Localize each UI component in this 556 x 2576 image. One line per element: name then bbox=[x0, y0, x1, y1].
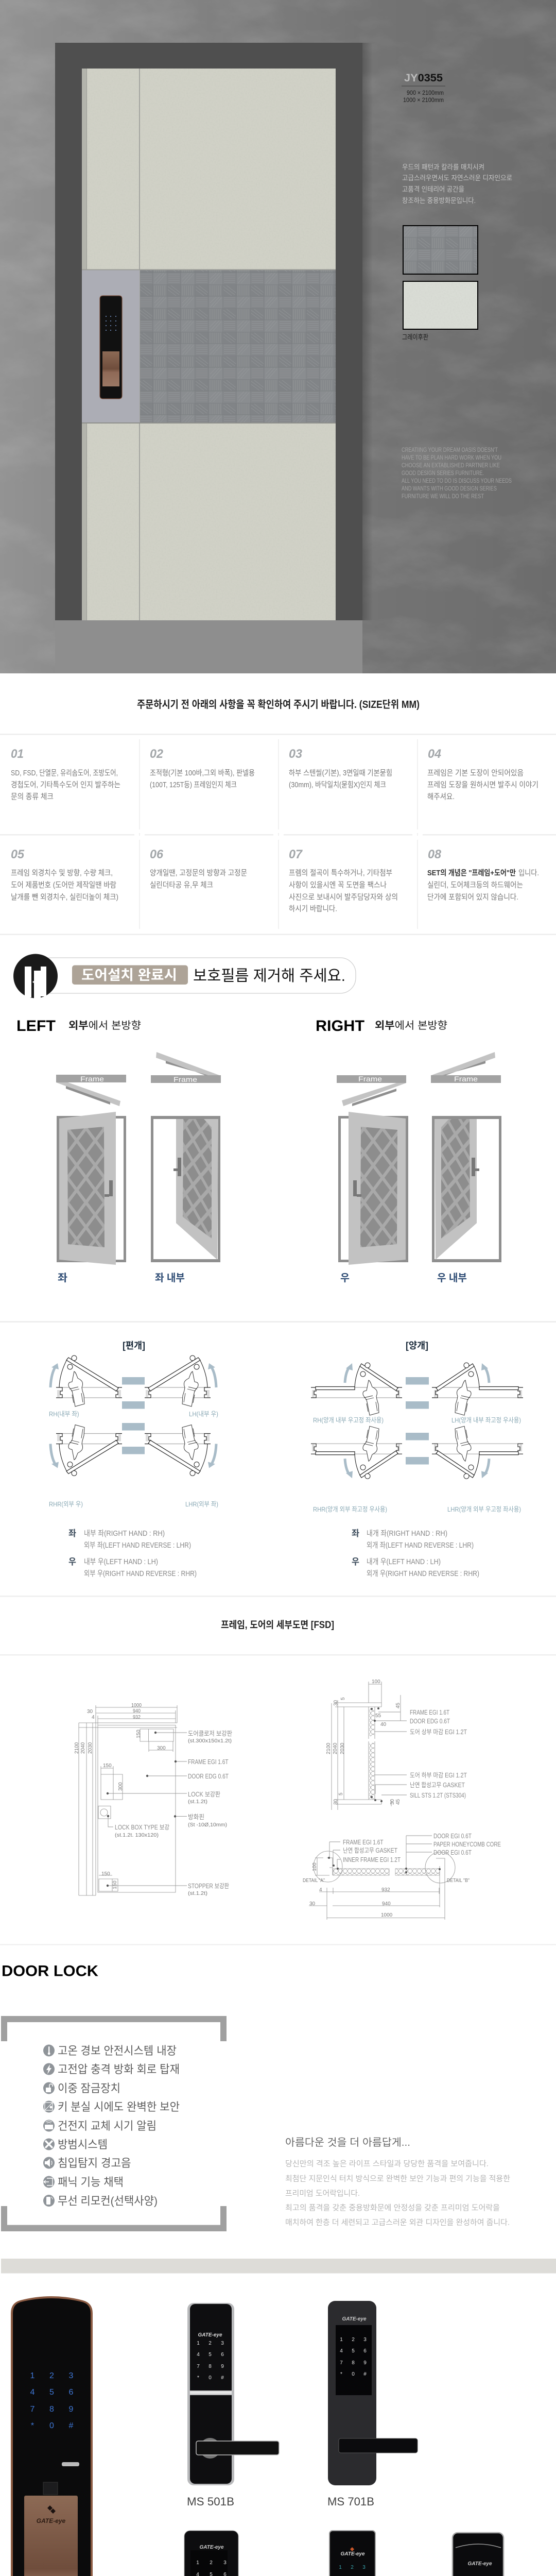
product: MS 701B lock: 1 bbox=[340, 2337, 343, 2343]
label: door right: 우 bbox=[340, 1273, 350, 1284]
door leaf bbox=[82, 69, 336, 620]
notice 08: 실린더, 도어체크등의 하드웨어는 bbox=[427, 881, 523, 889]
chart: horizontal section drawing: FRAME EGI 1.6T bbox=[343, 1839, 384, 1846]
chart: door elevation drawing: 2030 bbox=[88, 1742, 93, 1754]
product: MS 501B lock: 1 bbox=[197, 2341, 200, 2346]
notice 08: 단가에 포함되어 있지 않습니다. bbox=[427, 893, 518, 902]
heading: LEFT: 외부에서 본방향 bbox=[68, 1020, 141, 1031]
heading: single door: [편개] bbox=[123, 1341, 145, 1351]
floor band bbox=[55, 620, 362, 673]
chart: door elevation drawing: LOCK 보강판 bbox=[188, 1791, 220, 1798]
product: MS 501B lock: 0 bbox=[208, 2375, 212, 2381]
product: MS 501B lock: 3 bbox=[221, 2341, 224, 2346]
chart: door elevation drawing: 150 bbox=[101, 1871, 110, 1877]
product: MS 501B lock: 2 bbox=[208, 2341, 212, 2346]
text block: door lock description: 프리미엄 도어락입니다. bbox=[285, 2189, 360, 2198]
notice 03: 03 bbox=[289, 747, 303, 761]
panel: double door swing types bbox=[311, 1341, 523, 1578]
chart: vertical section drawing: 2100 bbox=[326, 1742, 332, 1754]
diagram: frame open outward bbox=[56, 1075, 126, 1106]
chart: door elevation drawing: (st.1.2t) bbox=[188, 1891, 207, 1896]
chart: vertical section drawing: 55 bbox=[375, 1713, 381, 1719]
product: MS 830B lock bbox=[184, 2531, 284, 2576]
product: MS 701B lock: GATE-eye bbox=[342, 2316, 367, 2322]
chart: vertical section drawing: 2030 bbox=[340, 1742, 345, 1754]
text block: door lock description: 최첨단 지문인식 터치 방식으로 완벽한 보안 기능과 편의 기능을 적용한 bbox=[285, 2174, 510, 2183]
notice 02: (100T, 125T등) 프레임인지 체크 bbox=[150, 781, 237, 789]
product: MSP 300 lock: 1 bbox=[30, 2371, 35, 2380]
banner: remove protective film bbox=[13, 954, 356, 998]
notice 07: 사진으로 보내시어 발주담당자와 상의 bbox=[289, 893, 398, 902]
chart: door elevation drawing: 2040 bbox=[80, 1742, 86, 1754]
heading: RIGHT: 외부에서 본방향 bbox=[375, 1020, 447, 1031]
notice 06 bbox=[150, 848, 247, 889]
pill label bbox=[72, 965, 188, 985]
chart: vertical section drawing: 100 bbox=[372, 1679, 380, 1685]
heading: order notice: 주문하시기 전 아래의 사항을 꼭 확인하여 주시기 바랍니다. (SIZE단위 MM) bbox=[137, 699, 420, 710]
chart: vertical section drawing: FRAME EGI 1.6T bbox=[410, 1709, 449, 1716]
chart: vertical section drawing: 도어 상부 마감 EGI 1.2T bbox=[410, 1728, 467, 1736]
notice 06: 06 bbox=[150, 848, 164, 861]
product: MS 701B lock: 9 bbox=[363, 2360, 367, 2366]
icon: door in circle bbox=[13, 954, 58, 998]
chart: door elevation drawing bbox=[74, 1703, 232, 1896]
heading: LEFT bbox=[16, 1018, 141, 1035]
product: MS 902 lock: GATE-eye bbox=[340, 2551, 365, 2557]
notice 07: 프렘의 절곡이 특수하거나, 기타첨부 bbox=[289, 869, 392, 877]
product: MS 902 lock bbox=[329, 2531, 418, 2576]
chart: horizontal section drawing bbox=[303, 1833, 501, 1920]
product: MS 601B lock bbox=[453, 2533, 553, 2576]
text: door sizes bbox=[403, 90, 444, 104]
chart: door elevation drawing: 150 bbox=[112, 1880, 118, 1889]
label: double LHR: LHR(양개 외부 우고정 좌사용) bbox=[447, 1505, 521, 1513]
notice 01: 01 bbox=[11, 747, 24, 761]
legend: single door: 외부 우(RIGHT HAND REVERSE : RHR) bbox=[84, 1569, 197, 1578]
chart: vertical section drawing: 도어 하부 마감 EGI 1.2T bbox=[410, 1772, 467, 1779]
notice 08: SET의 개념은 "프레임+도어"만 bbox=[427, 869, 516, 877]
product: MSP 300 lock: 0 bbox=[49, 2421, 54, 2430]
feature: panic function: 패닉 기능 채택 bbox=[58, 2176, 124, 2189]
notice 02: 조적형(기본 100바,그외 바폭), 판넬용 bbox=[150, 769, 255, 777]
panel: right swing bbox=[316, 1018, 501, 1284]
product: MS 902 lock: 2 bbox=[351, 2565, 354, 2570]
product: MSP 300 lock: * bbox=[31, 2421, 34, 2430]
notice 01: 경첩도어, 기타특수도어 인지 발주하는 bbox=[11, 781, 120, 789]
product: MS 501B lock: 5 bbox=[208, 2352, 212, 2358]
chart: horizontal section drawing: INNER FRAME EGI 1.2T bbox=[343, 1856, 401, 1863]
product: MS 902 lock: 3 bbox=[362, 2565, 366, 2570]
text: door sizes: 1000 × 2100mm bbox=[403, 97, 444, 104]
diagram: frame open inward bbox=[151, 1052, 221, 1083]
product: MSP 300 lock bbox=[11, 2296, 93, 2576]
text: Korean description: 고급스러우면서도 자연스러운 디자인으로 bbox=[402, 174, 512, 182]
notice 08 bbox=[427, 848, 539, 902]
product: MS 501B lock: * bbox=[197, 2375, 199, 2381]
product: MS 701B lock: 3 bbox=[363, 2337, 367, 2343]
text: English description: FURNITURE WE WILL DO THE REST bbox=[402, 494, 484, 500]
notice 03: 하부 스텐씰(기본), 3면일때 기본묻힘 bbox=[289, 769, 392, 777]
label: RHR: RHR(외부 우) bbox=[49, 1500, 83, 1508]
product: MS 701B lock: 8 bbox=[352, 2360, 355, 2366]
heading: LEFT: LEFT bbox=[16, 1018, 56, 1035]
swatch: weave pattern bbox=[403, 226, 478, 274]
feature: wireless remote: 무선 리모컨(선택사양) bbox=[58, 2195, 158, 2207]
feature: battery alert: 건전지 교체 시기 알림 bbox=[58, 2120, 157, 2132]
diagram: frame open outward: Frame bbox=[80, 1075, 104, 1083]
chart: vertical section drawing: 30 bbox=[390, 1799, 395, 1805]
legend: double door: 내개 우(LEFT HAND : LH) bbox=[367, 1557, 441, 1566]
diagram: right door exterior bbox=[338, 1112, 408, 1265]
heading: frame and door detail drawings: 프레임, 도어의 세부도면 [FSD] bbox=[221, 1619, 334, 1631]
chart: door elevation drawing: 150 bbox=[103, 1763, 112, 1769]
notice 01 bbox=[11, 747, 120, 801]
chart: door elevation drawing: 300 bbox=[118, 1782, 124, 1791]
chart: vertical section drawing: 40 bbox=[380, 1722, 387, 1727]
product: MSP 300 lock: 3 bbox=[69, 2371, 74, 2380]
product: MS 501B lock: 9 bbox=[221, 2364, 224, 2369]
product: MS 701B lock: 2 bbox=[352, 2337, 355, 2343]
chart: door elevation drawing: 932 bbox=[133, 1715, 141, 1720]
notice 05 bbox=[11, 848, 118, 902]
label: double RHR: RHR(양개 외부 좌고정 우사용) bbox=[313, 1505, 387, 1513]
feature: double lock: 이중 잠금장치 bbox=[58, 2082, 120, 2095]
notice 04 bbox=[427, 747, 538, 801]
product: MS 701B lock: 6 bbox=[363, 2348, 367, 2354]
label: RH: RH(내부 좌) bbox=[49, 1410, 79, 1418]
notice 02 bbox=[150, 747, 255, 789]
feature: lost key security: 키 분실 시에도 완벽한 보안 bbox=[58, 2100, 180, 2113]
product: MSP 300 lock: GATE-eye bbox=[37, 2517, 66, 2524]
chart: horizontal section drawing: 940 bbox=[382, 1901, 391, 1907]
notice 07: 사항이 있을시엔 꼭 도면을 팩스나 bbox=[289, 881, 387, 889]
legend: double door: 외개 좌(LEFT HAND REVERSE : LHR) bbox=[367, 1541, 474, 1550]
heading: RIGHT bbox=[316, 1018, 447, 1035]
legend: double door: 내개 좌(RIGHT HAND : RH) bbox=[367, 1529, 447, 1538]
divider band bbox=[1, 2259, 556, 2273]
product: MS 501B lock: # bbox=[221, 2375, 224, 2381]
notice 08: 08 bbox=[428, 848, 442, 861]
panel: hero door on concrete wall bbox=[0, 0, 556, 673]
notice 07: 07 bbox=[289, 848, 303, 861]
chart: vertical section drawing: 45 bbox=[395, 1799, 401, 1805]
legend: double door bbox=[352, 1529, 479, 1578]
notice 02: 02 bbox=[150, 747, 164, 761]
product: MS 830B lock: 1 bbox=[196, 2560, 199, 2566]
product: MSP 300 lock: 7 bbox=[30, 2405, 35, 2414]
chart: door elevation drawing: 30 bbox=[87, 1709, 93, 1715]
product: MS 501B lock: 6 bbox=[221, 2352, 224, 2358]
product: MS 701B lock: 5 bbox=[352, 2348, 355, 2354]
panel: left swing bbox=[16, 1018, 221, 1284]
chart: vertical section drawing: 5 bbox=[340, 1697, 346, 1700]
product: MS 701B lock: 4 bbox=[340, 2348, 343, 2354]
text: Korean description: 우드의 패턴과 칼라를 매치시켜 bbox=[402, 163, 484, 171]
chart: door elevation drawing: 4 bbox=[92, 1715, 95, 1720]
legend: double door: 좌 bbox=[352, 1529, 359, 1538]
notice 04: 04 bbox=[428, 747, 441, 761]
product: MS 701B lock: 0 bbox=[352, 2371, 355, 2377]
notice 06: 양개일땐, 고정문의 방향과 고정문 bbox=[150, 869, 247, 877]
product: MS 701B lock bbox=[327, 2301, 418, 2508]
product: MSP 300 lock: 2 bbox=[49, 2371, 54, 2380]
product: MS 830B lock: 3 bbox=[223, 2560, 227, 2566]
chart: door elevation drawing: DOOR EDG 0.6T bbox=[188, 1773, 229, 1780]
chart: horizontal section drawing: 1000 bbox=[381, 1912, 393, 1918]
text block: door lock description: 당신만의 격조 높은 라이프 스타일과 당당한 품격을 보여줍니다. bbox=[285, 2160, 489, 2168]
product: MS 701B lock: # bbox=[363, 2371, 367, 2377]
product: MS 501B lock: 8 bbox=[208, 2364, 212, 2369]
notice 05: 날개를 뺀 외경치수, 실린더높이 체크) bbox=[11, 893, 118, 902]
product: MSP 300 lock: 5 bbox=[49, 2388, 54, 2397]
product: MS 701B lock: 7 bbox=[340, 2360, 343, 2366]
diagram: single door four swings bbox=[50, 1355, 216, 1476]
label: double RH: RH(양개 내부 우고정 좌사용) bbox=[313, 1416, 384, 1424]
chart: vertical section drawing: 30 bbox=[333, 1700, 339, 1706]
diagram: frame open outward right bbox=[337, 1075, 406, 1106]
chart: vertical section drawing: 5 bbox=[338, 1792, 344, 1795]
chart: door elevation drawing: (st.1.2t. 130x120) bbox=[115, 1833, 159, 1838]
notice 06: 실린더타공 유,무 체크 bbox=[150, 881, 213, 889]
chart: vertical section drawing: 30 bbox=[333, 1799, 339, 1805]
heading: double door: [양개] bbox=[406, 1341, 428, 1351]
icon: door lock on leaf bbox=[100, 296, 122, 399]
legend: single door bbox=[68, 1529, 197, 1578]
chart: horizontal section drawing: DOOR EGI 0.6T bbox=[433, 1833, 472, 1840]
chart: door elevation drawing: 150 bbox=[136, 1730, 142, 1738]
legend: single door: 좌 bbox=[68, 1529, 76, 1538]
product: MSP 300 lock: 4 bbox=[30, 2388, 35, 2397]
text: door sizes: 900 × 2100mm bbox=[407, 90, 444, 96]
product: MS 830B lock: GATE-eye bbox=[199, 2545, 224, 2550]
label: door right interior: 우 내부 bbox=[437, 1272, 467, 1284]
notice 04: 해주셔요. bbox=[427, 792, 455, 801]
text: English description: CREATIING YOUR DREAM OASIS DOESN'T bbox=[402, 447, 498, 453]
panel: door lock features bbox=[1, 2016, 227, 2231]
panel: notice grid bbox=[0, 734, 556, 935]
notice 08: 입니다. bbox=[518, 869, 539, 877]
notice 01: 문의 종류 체크 bbox=[11, 792, 54, 801]
bracket: bottom bbox=[1, 2206, 227, 2231]
text: swatch label: 그레이후판 bbox=[402, 333, 428, 341]
text block: door lock description bbox=[285, 2137, 510, 2227]
legend: double door: 우 bbox=[352, 1557, 359, 1567]
notice 04: 프레임은 기본 도장이 안되어있음 bbox=[427, 769, 524, 777]
product: MS 501B lock bbox=[187, 2303, 279, 2508]
notice 03: (30mm), 바닥일치(묻힘X)인지 체크 bbox=[289, 781, 386, 789]
product: MS 501B lock: GATE-eye bbox=[198, 2332, 222, 2338]
text: English description: AND WANTS WITH GOOD DESIGN SERIES bbox=[402, 486, 497, 492]
diagram: frame open inward right bbox=[431, 1052, 501, 1083]
product: MS 601B lock: GATE-eye bbox=[467, 2561, 492, 2567]
chart: horizontal section drawing: PAPER HONEYCOMB CORE bbox=[433, 1841, 501, 1848]
diagram: frame open inward: Frame bbox=[173, 1075, 197, 1083]
door frame bbox=[55, 43, 362, 620]
chart: door elevation drawing: 940 bbox=[133, 1708, 141, 1714]
diagram: frame open inward right: Frame bbox=[454, 1075, 478, 1083]
banner text: 보호필름 제거해 주세요. bbox=[193, 968, 345, 985]
chart: vertical section drawing: 난연 합성고무 GASKET bbox=[410, 1782, 465, 1789]
chart: door elevation drawing: (st.1.2t) bbox=[188, 1799, 207, 1805]
notice 05: 프레임 외경치수 및 방향, 수량 체크, bbox=[11, 869, 113, 877]
chart: horizontal section drawing: DETAIL "A" bbox=[303, 1878, 325, 1884]
text: English description: CHOOSE AN EXTABLISHED PARTNER LIKE bbox=[402, 463, 500, 469]
chart: horizontal section drawing: 난연 합성고무 GASKET bbox=[343, 1847, 397, 1854]
label: door left: 좌 bbox=[58, 1272, 67, 1284]
text block: door lock description: 아름다운 것을 더 아름답게... bbox=[285, 2137, 410, 2148]
product: MSP 300 lock: # bbox=[69, 2421, 74, 2430]
text: Korean description: 창조하는 중용방화문입니다. bbox=[402, 197, 476, 205]
diagram: right door interior bbox=[432, 1116, 501, 1262]
feature: intrusion alarm: 침입탐지 경고음 bbox=[58, 2157, 131, 2170]
heading: RIGHT: RIGHT bbox=[316, 1018, 364, 1035]
product: MS 501B lock: 7 bbox=[197, 2364, 200, 2369]
legend: double door: 외개 우(RIGHT HAND REVERSE : RHR) bbox=[367, 1569, 479, 1578]
product: MSP 300 lock: 9 bbox=[69, 2405, 74, 2414]
label: LH: LH(내부 우) bbox=[189, 1410, 218, 1418]
text: English description: ALL YOU NEED TO DO IS DISCUSS YOUR NEEDS bbox=[402, 478, 512, 484]
feature: high voltage protection: 고전압 충격 방화 회로 탑재 bbox=[58, 2063, 180, 2076]
feature: crime prevention: 방범시스템 bbox=[58, 2138, 108, 2151]
chart: door elevation drawing: LOCK BOX TYPE 보강 bbox=[115, 1824, 169, 1831]
product: MSP 300 lock: 8 bbox=[49, 2405, 54, 2414]
product: MS 902 lock: 1 bbox=[339, 2565, 342, 2570]
chart: horizontal section drawing: 100 bbox=[312, 1862, 318, 1871]
diagram: frame open outward right: Frame bbox=[358, 1075, 382, 1083]
diagram: double door four swings bbox=[311, 1363, 523, 1479]
product: MS 501B lock: 4 bbox=[197, 2352, 200, 2358]
notice 04: 프레임 도장을 원하시면 발주시 이야기 bbox=[427, 781, 538, 789]
text: Korean description: 고품격 인테리어 공간을 bbox=[402, 185, 464, 193]
chart: door elevation drawing: 2100 bbox=[74, 1742, 80, 1754]
legend: single door: 내부 좌(RIGHT HAND : RH) bbox=[84, 1529, 165, 1538]
feature: high temperature alarm: 고온 경보 안전시스템 내장 bbox=[58, 2044, 177, 2057]
legend: single door: 내부 우(LEFT HAND : LH) bbox=[84, 1557, 158, 1566]
text: Korean description bbox=[402, 163, 512, 205]
chart: horizontal section drawing: 4 bbox=[319, 1887, 322, 1893]
notice 05: 05 bbox=[11, 848, 25, 861]
label: door left interior: 좌 내부 bbox=[155, 1272, 185, 1284]
title: model number: JY0355 bbox=[404, 72, 443, 84]
notice 07: 하시기 바랍니다. bbox=[289, 905, 337, 913]
chart: horizontal section drawing: DETAIL "B" bbox=[447, 1878, 470, 1884]
label: LHR: LHR(외부 좌) bbox=[185, 1500, 218, 1508]
chart: door elevation drawing: 300 bbox=[157, 1745, 166, 1751]
chart: door elevation drawing: (st.300x150x1.2t) bbox=[188, 1738, 232, 1744]
text block: door lock description: 매치하여 한층 더 세련되고 고급스러운 외관 디자인을 완성하여 줍니다. bbox=[285, 2218, 510, 2227]
chart: door elevation drawing: 1000 bbox=[131, 1703, 142, 1708]
label: MS 501B: MS 501B bbox=[187, 2495, 234, 2508]
chart: door elevation drawing: STOPPER 보강판 bbox=[188, 1883, 229, 1890]
chart: horizontal section drawing: DOOR EGI 0.6T bbox=[433, 1849, 472, 1856]
product: MS 701B lock: * bbox=[340, 2371, 342, 2377]
chart: vertical section drawing: 45 bbox=[395, 1702, 401, 1708]
swatch: leather white bbox=[403, 281, 478, 329]
chart: horizontal section drawing: 30 bbox=[309, 1901, 316, 1907]
notice 03 bbox=[289, 747, 392, 789]
pill label: 도어설치 완료시 bbox=[81, 968, 177, 983]
bracket: top bbox=[1, 2016, 227, 2041]
chart: vertical section drawing: DOOR EDG 0.6T bbox=[410, 1718, 450, 1725]
chart: door elevation drawing: 방화핀 bbox=[188, 1814, 204, 1821]
heading: DOOR LOCK: DOOR LOCK bbox=[2, 1963, 98, 1979]
panel: single door swing types bbox=[49, 1341, 218, 1578]
product: MSP 300 lock: 6 bbox=[69, 2388, 74, 2397]
chart: door elevation drawing: (St -10Ø,10mm) bbox=[188, 1822, 227, 1828]
notice 01: SD, FSD, 단열문, 유리솜도어, 조방도어, bbox=[11, 769, 118, 777]
label: MS 701B: MS 701B bbox=[327, 2495, 374, 2508]
text: English description: GOOD DESIGN SERIES FURNITURE. bbox=[402, 470, 484, 477]
legend: single door: 우 bbox=[68, 1557, 76, 1567]
chart: horizontal section drawing: 932 bbox=[381, 1887, 390, 1893]
chart: vertical section drawing: 2040 bbox=[333, 1742, 338, 1754]
chart: vertical section drawing: SILL STS 1.2T (STS304) bbox=[410, 1792, 466, 1799]
chart: vertical section drawing bbox=[326, 1679, 467, 1810]
chart: door elevation drawing: FRAME EGI 1.6T bbox=[188, 1758, 229, 1766]
notice 05: 도어 제품번호 (도어만 제작일땐 바람 bbox=[11, 881, 116, 889]
text: English description bbox=[402, 447, 512, 500]
diagram: left door interior bbox=[151, 1116, 220, 1262]
chart: door elevation drawing: 도어클로저 보강판 bbox=[188, 1730, 232, 1737]
notice 07 bbox=[289, 848, 398, 913]
text: English description: HAVE TO BE PLAN HARD WORK WHEN YOU bbox=[402, 455, 501, 461]
text block: door lock description: 최고의 품격을 갖춘 중용방화문에 안정성을 갖춘 프리미엄 도어락을 bbox=[285, 2204, 500, 2212]
legend: single door: 외부 좌(LEFT HAND REVERSE : LHR) bbox=[84, 1541, 191, 1550]
diagram: left door exterior bbox=[57, 1112, 126, 1265]
label: double LH: LH(양개 내부 좌고정 우사용) bbox=[451, 1416, 521, 1424]
product: MS 830B lock: 2 bbox=[210, 2560, 213, 2566]
